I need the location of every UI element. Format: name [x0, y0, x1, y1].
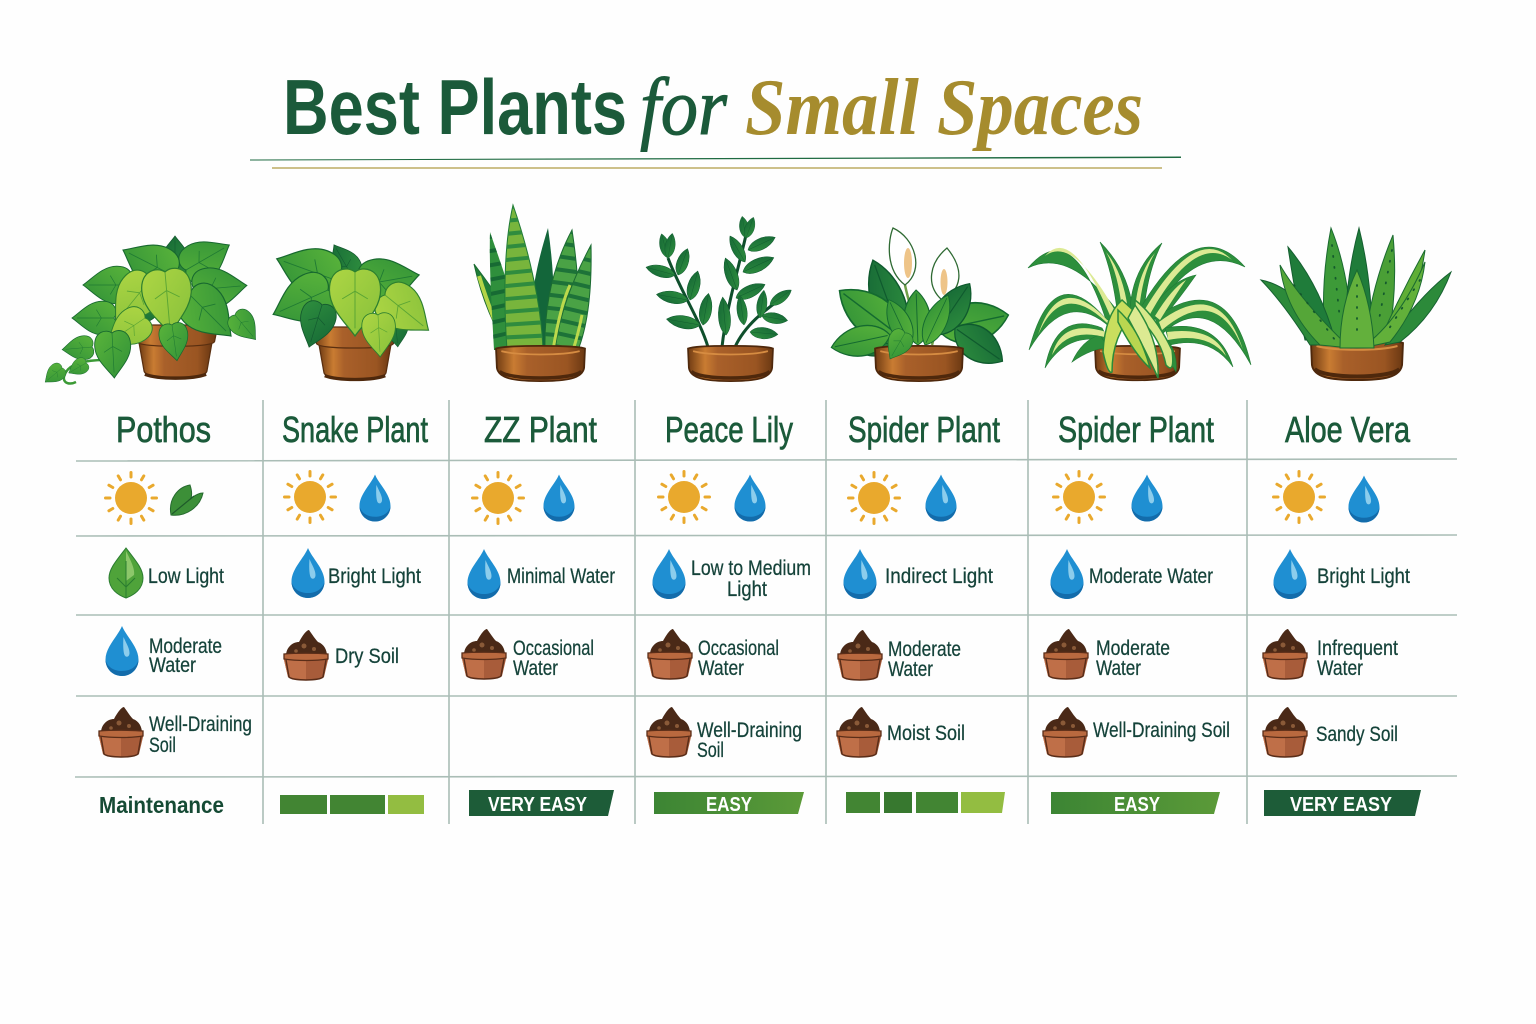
water label: Minimal Water [507, 565, 615, 588]
plant name: Snake Plant [282, 409, 428, 450]
maintenance bar [280, 795, 424, 814]
water label: Moderate [149, 635, 222, 658]
icon: drop [292, 548, 324, 598]
plant: spider plant [1028, 242, 1251, 380]
plant name: ZZ Plant [484, 409, 597, 450]
maintenance badge: EASY [706, 794, 753, 816]
icon: drop [359, 474, 391, 522]
maintenance row label: Maintenance [99, 792, 224, 818]
column: Snake Plant [263, 235, 443, 814]
water label: Water [698, 657, 744, 680]
water label: Moderate [888, 638, 961, 661]
maintenance badge: EASY [1114, 794, 1161, 816]
light label: Low to Medium [691, 557, 811, 580]
icon: soil [462, 629, 506, 679]
soil label: Dry Soil [335, 645, 399, 668]
maintenance badge [1051, 792, 1220, 816]
icon: drop [1050, 549, 1084, 599]
icon: drop [468, 549, 500, 599]
soil label: Well-Draining Soil [1093, 719, 1230, 742]
icon: soil [1263, 629, 1307, 679]
icon: sun [848, 472, 900, 524]
light label: Indirect Light [885, 565, 993, 588]
plant: aloe vera [1261, 228, 1451, 380]
soil label: Soil [149, 734, 176, 757]
plant name: Aloe Vera [1285, 409, 1411, 450]
maintenance badge: VERY EASY [488, 794, 588, 816]
plant: pothos style [263, 235, 443, 380]
water label: Moderate Water [1089, 565, 1213, 588]
light label: Low Light [148, 565, 224, 588]
column: Peace Lily [645, 216, 811, 816]
maintenance badge: VERY EASY [1290, 794, 1393, 816]
icon: sun [284, 472, 336, 522]
water label: Infrequent [1317, 637, 1398, 660]
icon: drop [543, 474, 575, 522]
icon: drop [106, 626, 138, 676]
soil label: Moist Soil [887, 722, 965, 745]
plant name: Spider Plant [848, 409, 1000, 450]
icon: drop [1274, 549, 1306, 599]
maintenance badge [654, 792, 804, 816]
water label: Water [888, 658, 933, 681]
water label: Water [1096, 657, 1141, 680]
water label: Occasional [513, 637, 594, 660]
water label: Water [513, 657, 558, 680]
soil label: Well-Draining [697, 719, 802, 742]
plant: snake plant style [474, 205, 591, 381]
icon: drop [1131, 474, 1163, 522]
title: Small Spaces [745, 64, 1143, 152]
maintenance bar [846, 792, 1005, 813]
plant name: Spider Plant [1058, 409, 1214, 450]
icon: sun [658, 472, 710, 522]
icon: sun [472, 472, 524, 524]
title [250, 61, 1181, 168]
icon: leaf pair [170, 485, 203, 515]
column: Aloe Vera [1261, 228, 1451, 816]
soil label: Sandy Soil [1316, 723, 1398, 746]
column: ZZ Plant [462, 205, 615, 816]
icon: sun [1054, 472, 1104, 522]
icon: leaf [109, 548, 143, 598]
icon: sun [1274, 472, 1324, 522]
column: Pothos [39, 228, 265, 818]
icon: drop [844, 549, 876, 599]
soil label: Soil [697, 739, 724, 762]
column: Spider Plant [1028, 242, 1251, 816]
icon: soil [648, 629, 692, 679]
column: Spider Plant (peace lily image) [828, 228, 1013, 813]
title: for [640, 61, 728, 152]
plant: Pothos [39, 228, 265, 389]
soil label: Well-Draining [149, 713, 252, 736]
plant name: Pothos [116, 409, 211, 450]
icon: soil [1043, 707, 1087, 757]
icon: soil [837, 707, 881, 757]
icon: soil [1263, 707, 1307, 757]
infographic canvas [44, 76, 1457, 824]
icon: soil [838, 630, 882, 680]
water label: Occasional [698, 637, 779, 660]
title: Best Plants [283, 63, 627, 151]
icon: drop [734, 474, 766, 522]
water label: Water [1317, 657, 1363, 680]
icon: drop [652, 549, 686, 599]
water label: Moderate [1096, 637, 1170, 660]
maintenance badge [469, 790, 614, 816]
plant name: Peace Lily [665, 409, 793, 450]
light label: Light [727, 578, 767, 601]
plant: ZZ style [645, 216, 794, 381]
icon: drop [925, 474, 957, 522]
icon: soil [99, 707, 143, 757]
plant: peace lily [828, 228, 1013, 381]
icon: drop [1348, 476, 1380, 522]
light label: Bright Light [1317, 565, 1410, 588]
light label: Bright Light [328, 565, 421, 588]
water label: Water [149, 654, 196, 677]
icon: soil [647, 707, 691, 757]
icon: soil [284, 630, 328, 680]
icon: sun [106, 472, 156, 524]
icon: soil [1044, 629, 1088, 679]
maintenance badge [1264, 790, 1421, 816]
